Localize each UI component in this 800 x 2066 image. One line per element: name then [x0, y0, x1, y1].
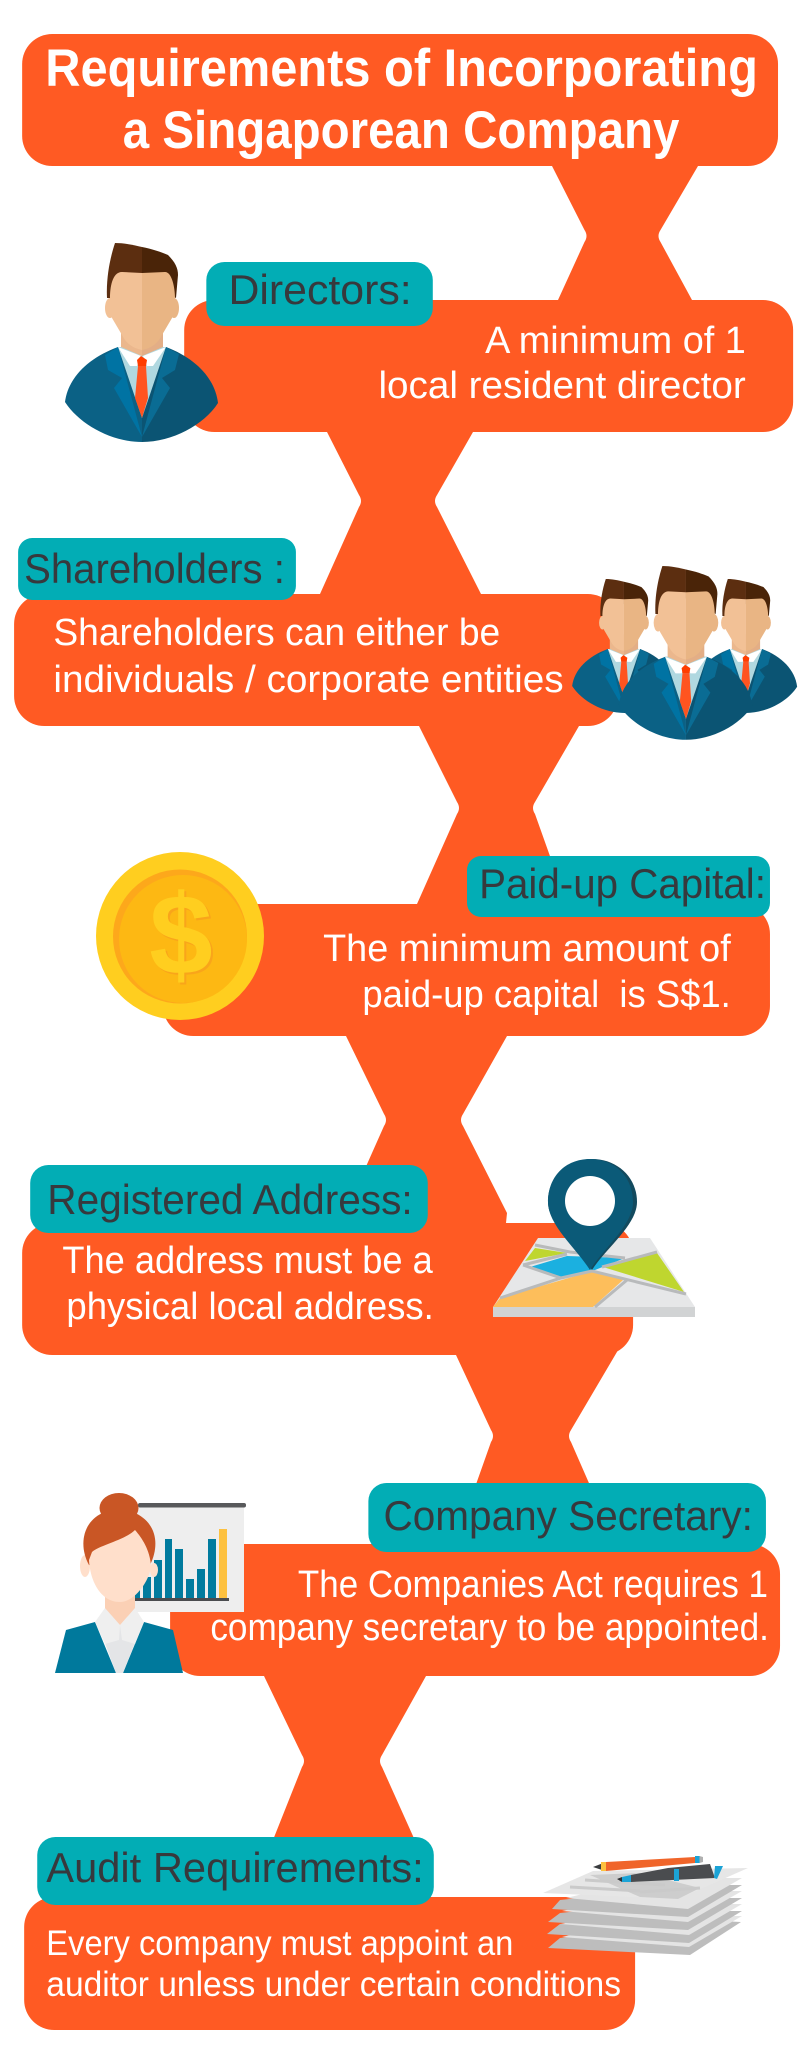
icon: group of shareholders — [572, 566, 797, 740]
connector: company secretary to audit requirements — [264, 1670, 426, 1845]
panel: audit requirements: auditor unless under certain conditions — [46, 1965, 621, 2004]
panel: shareholders: individuals / corporate entities — [53, 658, 564, 701]
panel: paid-up capital — [163, 856, 770, 1036]
panel: shareholders: Shareholders : — [24, 545, 285, 592]
title: a Singaporean Company — [123, 101, 680, 160]
panel: directors — [184, 262, 793, 432]
icon: director — [65, 243, 218, 442]
icon: centre shareholder — [619, 566, 752, 740]
panel: audit requirements — [24, 1837, 635, 2030]
panel: paid-up capital: paid-up capital is S$1. — [362, 973, 731, 1016]
icon: stack of papers with pens — [543, 1856, 748, 1955]
panel: shareholders: Shareholders can either be — [53, 611, 500, 654]
connector: registered address to company secretary — [456, 1340, 624, 1490]
panel: registered address: physical local address. — [66, 1285, 434, 1328]
panel: registered address: Registered Address: — [47, 1176, 413, 1223]
icon: left shareholder — [572, 579, 675, 713]
panel: directors: Directors: — [228, 266, 412, 313]
connector: paid-up capital to registered address — [346, 1030, 507, 1230]
icon: right shareholder — [694, 579, 797, 713]
icon: dollar coin: $ — [149, 872, 213, 999]
panel: company secretary: company secretary to be appointed. — [210, 1606, 769, 1649]
connector: shareholders to paid-up capital — [417, 720, 579, 910]
panel: shareholders — [14, 538, 618, 726]
icon: dollar coin — [96, 852, 264, 1020]
title — [22, 34, 778, 166]
connector: directors to shareholders — [320, 426, 481, 600]
icon: map with location pin — [493, 1159, 695, 1317]
panel: company secretary: The Companies Act requires 1 — [298, 1563, 768, 1606]
panel: registered address — [22, 1165, 633, 1355]
panel: paid-up capital: The minimum amount of — [323, 927, 731, 970]
panel: directors: A minimum of 1 — [485, 319, 746, 362]
panel: company secretary — [170, 1483, 780, 1676]
panel: audit requirements: Audit Requirements: — [46, 1844, 424, 1891]
panel: directors: local resident director — [378, 364, 746, 407]
panel: paid-up capital: Paid-up Capital: — [479, 860, 766, 907]
connector: title to directors — [552, 160, 698, 306]
panel: audit requirements: Every company must appoint an — [46, 1924, 513, 1963]
panel: company secretary: Company Secretary: — [383, 1492, 753, 1539]
panel: registered address: The address must be a — [62, 1239, 434, 1282]
icon: woman presenting chart — [55, 1493, 246, 1673]
